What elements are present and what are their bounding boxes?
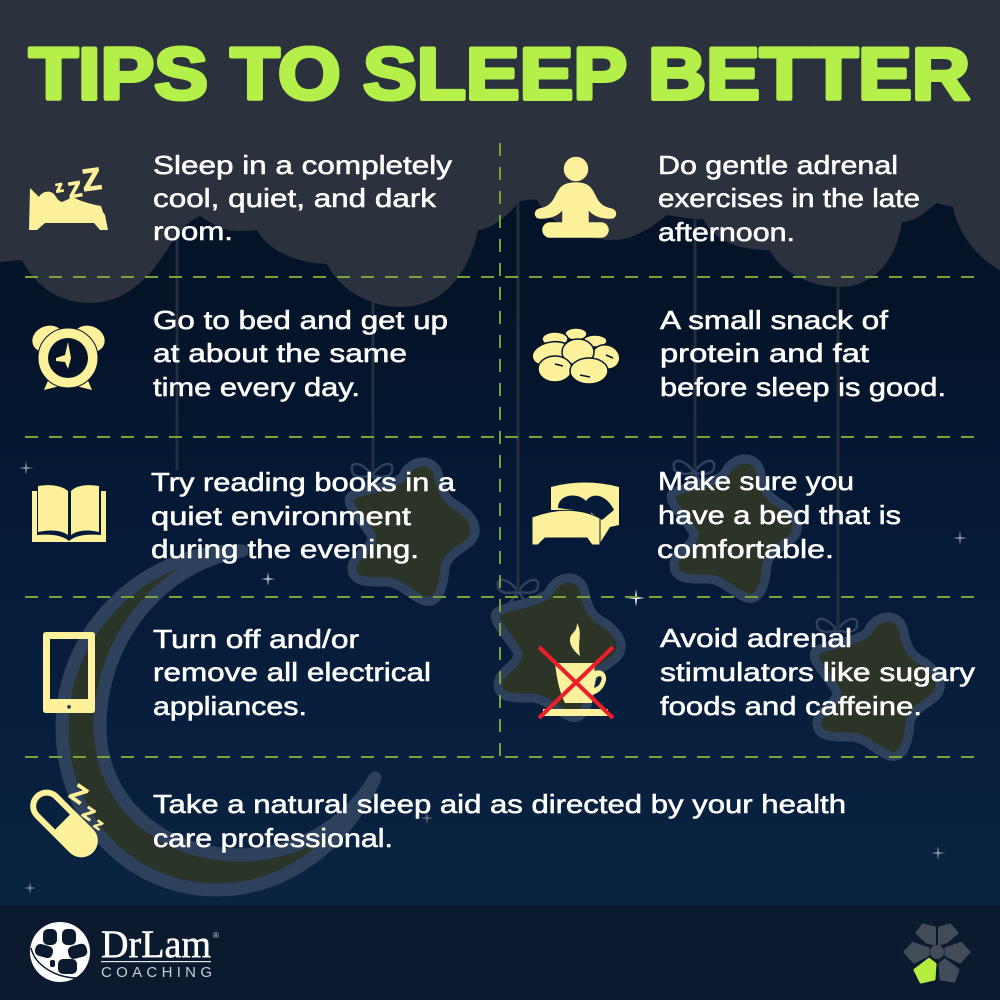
logo registered mark: ® — [213, 931, 219, 940]
tip: stimulators — [660, 623, 975, 721]
tip: bedtime: at about the same — [153, 338, 407, 368]
hanging star 2 — [495, 578, 621, 717]
tip: reading: Try reading books in a — [151, 467, 456, 497]
icon: meditation — [536, 158, 616, 237]
footer bar — [0, 905, 1000, 1000]
logo wordmark: DrLam — [101, 923, 211, 966]
icon: sleeping in bed — [29, 161, 108, 230]
tip: stimulators: stimulators like sugary — [660, 657, 975, 687]
title: TIPS TO SLEEP BETTER — [29, 34, 970, 115]
watermark flower — [905, 925, 969, 982]
icon: open book — [32, 485, 106, 542]
tip: reading: during the evening. — [151, 534, 419, 564]
tip: reading: quiet environment — [151, 501, 412, 531]
tip: reading — [151, 467, 456, 564]
logo rule — [101, 961, 211, 962]
sparkles — [19, 461, 967, 894]
icon: tablet — [43, 632, 95, 713]
tip: sleep room: cool, quiet, and dark — [153, 183, 437, 213]
cloud band — [0, 0, 1000, 307]
tip: sleep room: Sleep in a completely — [153, 150, 452, 180]
tip: electrical appliances: remove all electrical — [153, 657, 431, 687]
icon: sleeping in bed: Z — [66, 176, 84, 203]
tip: bedtime: time every day. — [153, 372, 360, 402]
icon: sleeping pill: Z — [65, 779, 92, 810]
icon: crossed-out coffee cup — [539, 623, 613, 718]
tip: comfortable bed — [657, 466, 901, 564]
hanging strings — [177, 200, 838, 630]
tip: sleep aid — [153, 789, 846, 853]
tip: adrenal exercises: exercises in the late — [658, 183, 920, 213]
icon: sleeping pill: Z — [91, 817, 105, 833]
tip: stimulators: foods and caffeine. — [660, 691, 922, 721]
tip: comfortable bed: Make sure you — [658, 466, 854, 496]
crescent moon — [62, 551, 375, 890]
tip: sleep room — [153, 150, 452, 246]
logo emblem — [30, 922, 90, 982]
tip: adrenal exercises: afternoon. — [658, 217, 795, 247]
tip: sleep room: room. — [153, 216, 233, 246]
tip: electrical appliances: Turn off and/or — [153, 624, 359, 654]
tip: snack: before sleep is good. — [660, 372, 946, 402]
tip: adrenal exercises: Do gentle adrenal — [658, 150, 898, 180]
hanging star 3 — [671, 459, 797, 598]
logo tagline: COACHING — [101, 964, 212, 981]
icon: sleeping pill — [26, 779, 105, 863]
icon: nuts and beans — [530, 328, 623, 384]
tip: electrical appliances — [153, 624, 431, 721]
logo: DrLam Coaching — [30, 922, 219, 982]
tip: sleep aid: care professional. — [153, 823, 393, 853]
tip: stimulators: Avoid adrenal — [660, 623, 852, 653]
icon: sleeping pill: Z — [79, 803, 98, 825]
dashed grid dividers — [25, 143, 975, 757]
tip: snack — [660, 305, 946, 402]
icon: bed — [532, 482, 619, 545]
hanging star 4 — [814, 617, 940, 756]
hanging star 1 — [349, 462, 475, 601]
icon: sleeping in bed: z — [54, 178, 65, 197]
tip: electrical appliances: appliances. — [153, 691, 307, 721]
icon: sleeping in bed: Z — [80, 161, 104, 198]
tip: comfortable bed: comfortable. — [657, 534, 834, 564]
tip: comfortable bed: have a bed that is — [658, 500, 901, 530]
tip: snack: A small snack of — [660, 305, 889, 335]
tip: adrenal exercises — [658, 150, 920, 247]
tip: snack: protein and fat — [660, 338, 870, 368]
tip: bedtime: Go to bed and get up — [153, 305, 448, 335]
icon: alarm clock — [29, 321, 108, 390]
tip: bedtime — [153, 305, 448, 402]
tip: sleep aid: Take a natural sleep aid as directed by your health — [153, 789, 846, 819]
